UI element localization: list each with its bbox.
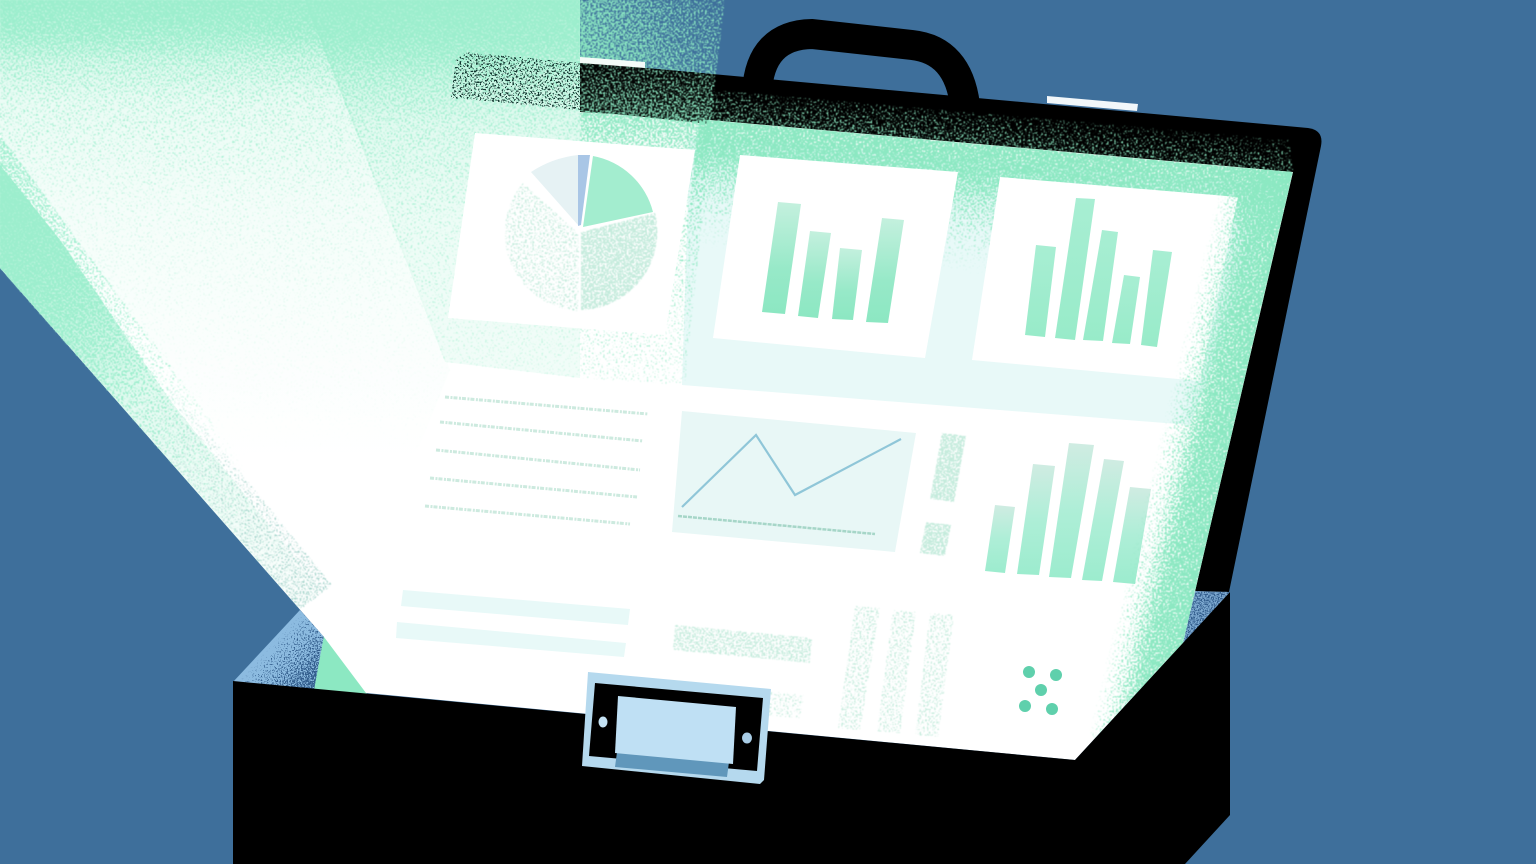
icon: dots xyxy=(1019,666,1062,715)
grainy beam column above lid xyxy=(580,0,725,124)
pie slice: upper left xyxy=(531,155,578,225)
case interior: left corner xyxy=(233,610,324,690)
vertical bars xyxy=(838,606,954,737)
briefcase front xyxy=(233,592,1230,864)
light beam and paper xyxy=(0,0,1293,760)
grainy lower beam edge xyxy=(120,385,332,610)
pie slice: mint xyxy=(583,156,653,227)
text blocks: bottom middle xyxy=(673,625,812,718)
grain beside pie panel xyxy=(580,112,712,385)
panel: pie chart xyxy=(448,133,695,335)
text lines xyxy=(425,397,648,524)
panel: bar chart 2 xyxy=(972,177,1238,381)
icon: briefcase handle xyxy=(757,34,965,105)
document xyxy=(396,112,1293,770)
bar chart 3 xyxy=(985,443,1151,584)
panel: line chart xyxy=(672,411,916,552)
beam glow: pale strip xyxy=(0,135,300,610)
panel: bar chart 1 xyxy=(713,155,958,358)
panel: chart backdrop xyxy=(682,135,1285,425)
lid interior: right corner xyxy=(1182,591,1230,644)
panel: lower white card xyxy=(920,415,1190,640)
lid latch: right xyxy=(1047,96,1138,111)
icon: briefcase clasp xyxy=(582,672,771,784)
text bars: bottom left xyxy=(396,590,630,657)
briefcase lid xyxy=(450,52,1321,640)
beam glow: second cone xyxy=(305,0,580,378)
mint grain rising over the lid xyxy=(710,90,1293,172)
paper right edge glow xyxy=(1080,156,1293,770)
beam glow: main shaft xyxy=(0,0,450,620)
pie slice: blue sliver xyxy=(578,155,590,226)
pie slice: large left xyxy=(505,183,579,311)
paper top glow xyxy=(686,119,1293,273)
pie slice: lower right xyxy=(581,213,657,310)
beam glow: mint strip xyxy=(0,165,320,610)
lid seen through the beam xyxy=(451,52,712,124)
small blocks xyxy=(920,433,966,556)
mint corner of paper xyxy=(314,635,368,695)
